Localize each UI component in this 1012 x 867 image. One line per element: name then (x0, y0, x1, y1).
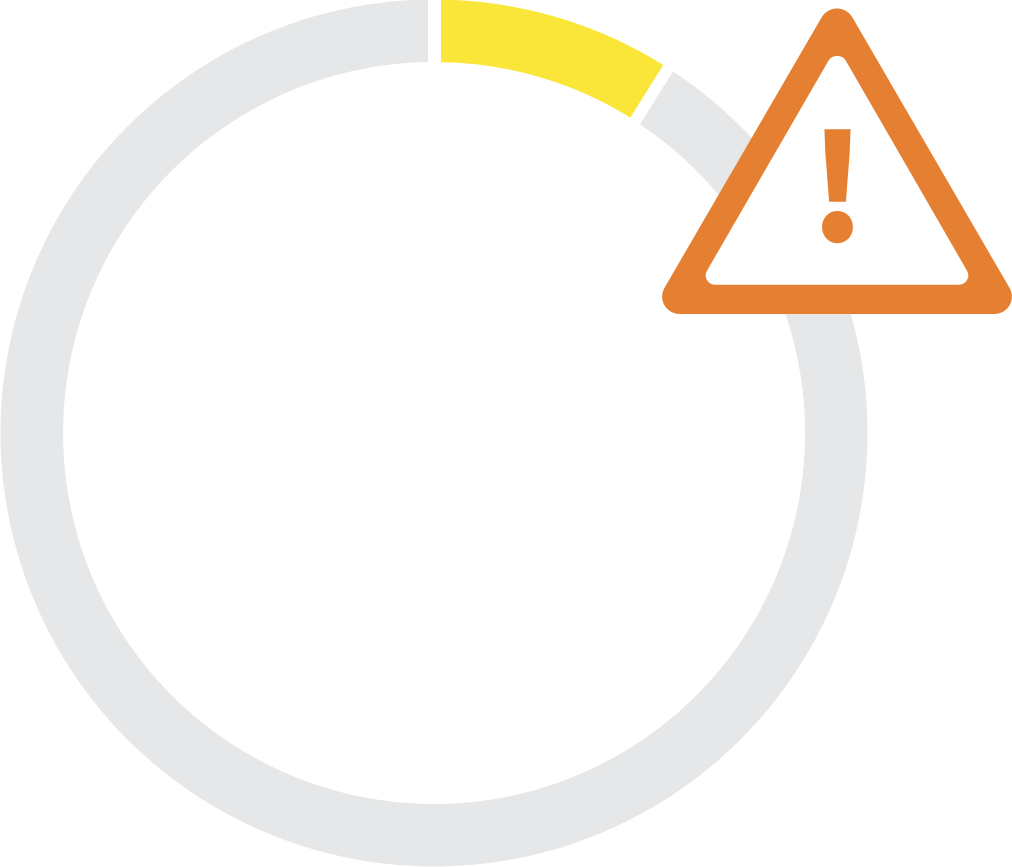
triangle frame (662, 8, 1012, 314)
exclamation mark: ! (809, 73, 866, 284)
icon: warning triangle (662, 8, 1012, 314)
triangle inner panel (706, 56, 968, 285)
yellow highlighted segment (441, 0, 663, 118)
